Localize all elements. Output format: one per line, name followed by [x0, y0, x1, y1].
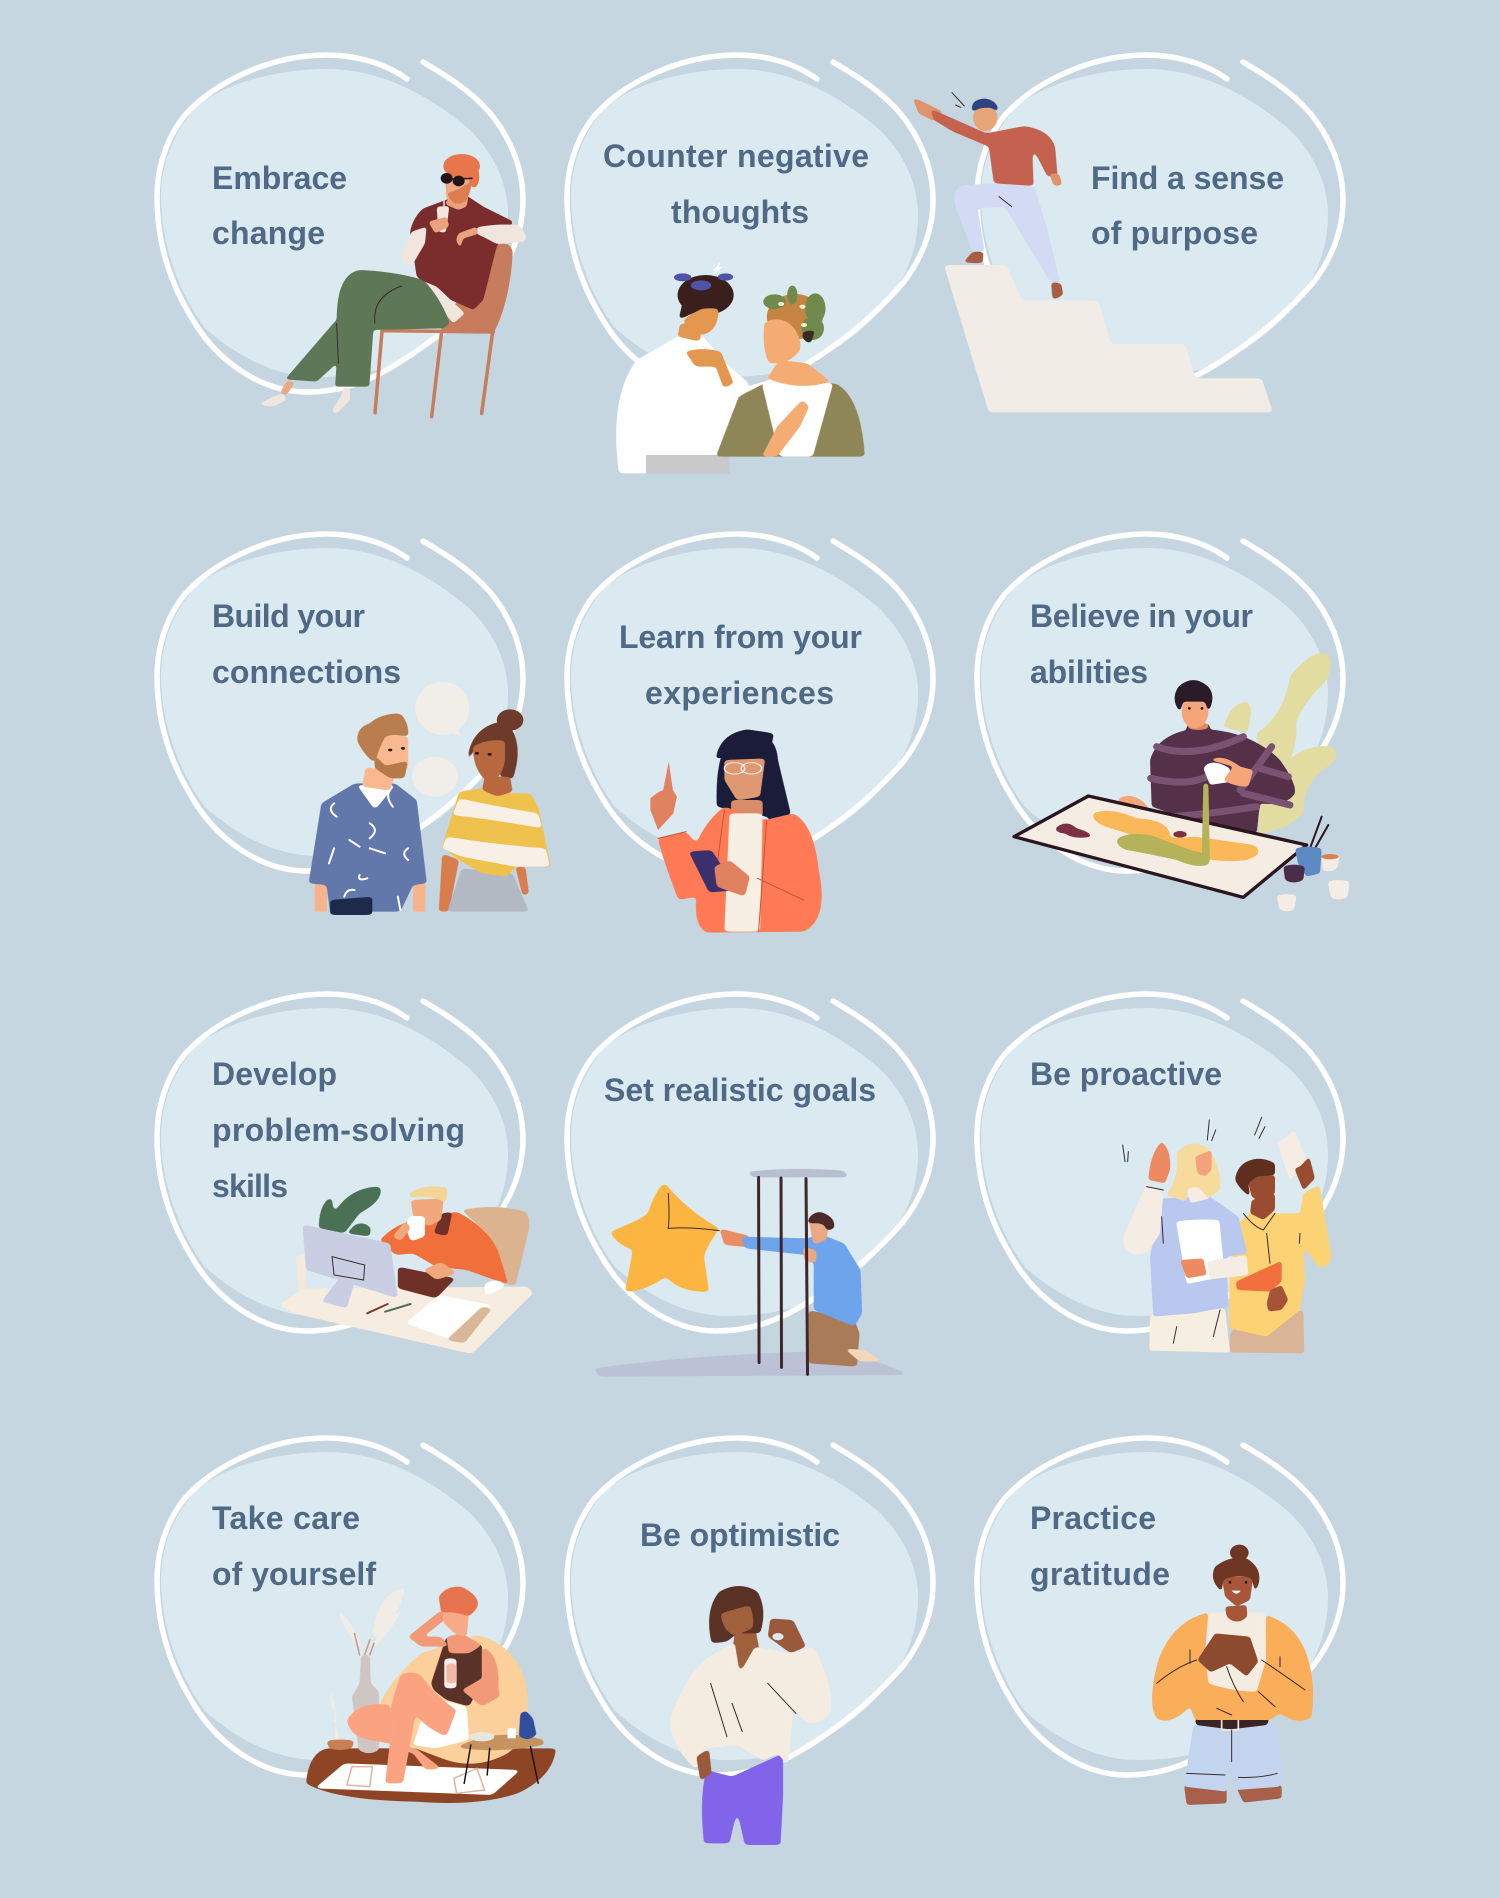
figure: woman relaxing on rug	[306, 1586, 556, 1803]
heading: Take care of yourself: of yourself	[212, 1556, 376, 1592]
figure: woman with phone raising finger	[650, 729, 822, 933]
heading: Practice gratitude: Practice	[1030, 1500, 1156, 1536]
panel: Find a sense of purpose	[912, 55, 1343, 412]
heading: Set realistic goals: Set realistic goals	[604, 1072, 876, 1108]
heading: Practice gratitude	[1030, 1500, 1170, 1592]
heading: Build your connections	[212, 598, 401, 690]
heading: Develop problem-solving skills: problem-solving	[212, 1112, 465, 1148]
figure: two people with storm and leaves	[616, 262, 865, 474]
heading: Learn from your experiences: experiences	[645, 675, 834, 711]
figure: man reaching through bars to star	[594, 1169, 908, 1377]
heading: Learn from your experiences	[619, 619, 862, 711]
heading: Counter negative thoughts: thoughts	[671, 194, 809, 230]
heading: Embrace change: Embrace	[212, 160, 347, 196]
heading: Develop problem-solving skills: Develop	[212, 1056, 337, 1092]
panel: Build your connections	[157, 534, 551, 915]
heading: Learn from your experiences: Learn from your	[619, 619, 862, 655]
panel: Develop problem-solving skills	[157, 994, 533, 1354]
heading: Develop problem-solving skills	[212, 1056, 465, 1204]
panel: Take care of yourself	[157, 1438, 556, 1803]
heading: Develop problem-solving skills: skills	[212, 1168, 288, 1204]
heading: Believe in your abilities: Believe in your	[1030, 598, 1253, 634]
panel: Learn from your experiences	[567, 534, 933, 933]
figure: man climbing stairs	[912, 93, 1273, 412]
heading: Find a sense of purpose	[1091, 160, 1284, 251]
heading: Believe in your abilities: abilities	[1030, 654, 1148, 690]
panel: Counter negative thoughts	[567, 55, 933, 474]
panel: Embrace change	[157, 55, 526, 417]
heading: Be proactive: Be proactive	[1030, 1056, 1222, 1092]
panel: Set realistic goals	[567, 994, 933, 1377]
heading: Take care of yourself	[212, 1500, 376, 1592]
panel: Be optimistic	[567, 1438, 933, 1845]
panel: Practice gratitude	[977, 1438, 1343, 1805]
heading: Counter negative thoughts: Counter negative	[603, 138, 869, 174]
heading: Find a sense of purpose: of purpose	[1091, 215, 1258, 251]
heading: Practice gratitude: gratitude	[1030, 1556, 1170, 1592]
figure: man pouring paint	[1014, 653, 1350, 911]
heading: Build your connections: Build your	[212, 598, 365, 634]
figure: man sitting on chair	[258, 154, 526, 417]
figure: man drinking at desk	[279, 1186, 533, 1354]
figure: man and woman talking	[309, 682, 551, 915]
heading: Embrace change: change	[212, 215, 325, 251]
figure: woman with hands on heart	[1152, 1545, 1313, 1805]
heading: Be optimistic: Be optimistic	[640, 1517, 840, 1553]
heading: Embrace change	[212, 160, 347, 251]
heading: Believe in your abilities	[1030, 598, 1253, 690]
figure: two colleagues raising hands	[1123, 1117, 1332, 1353]
heading: Build your connections: connections	[212, 654, 401, 690]
heading: Find a sense of purpose: Find a sense	[1091, 160, 1284, 196]
figure: woman making OK gesture	[670, 1586, 832, 1845]
heading: Counter negative thoughts	[603, 138, 869, 230]
heading: Take care of yourself: Take care	[212, 1500, 360, 1536]
panel: Believe in your abilities	[977, 534, 1350, 911]
panel: Be proactive	[977, 994, 1343, 1353]
